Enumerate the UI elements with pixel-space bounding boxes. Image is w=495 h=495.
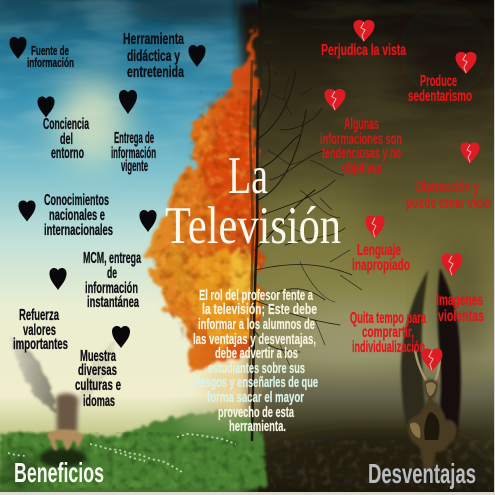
text: Conciencia del entorno: del: [60, 131, 73, 148]
frame line at the right edge: [494, 0, 495, 495]
icon: broken heart 7: [422, 348, 442, 372]
text block: role of the teacher: El rol del profesor fente a: [199, 287, 313, 304]
text: Algunas informaciones son tendenciosas y no objetivas: informaciones son: [320, 131, 402, 148]
text: Refuerza valores importantes: Refuerza: [19, 307, 59, 324]
text: Distracción y puede crear vicio: [406, 179, 491, 212]
icon: heart 7: [49, 268, 67, 290]
illustration: winged angel figure: [10, 337, 115, 450]
frame line at the bottom edge: [0, 492, 495, 495]
text: Herramienta didáctica y entretenida: didáctica y: [127, 48, 180, 65]
text: Quita tempo para comprartir, individualización: [350, 310, 426, 356]
text: Muestra diversas culturas e idomas: [75, 348, 121, 410]
text: Fuente de información: información: [27, 55, 74, 70]
background: bright sky (benefits side): [0, 0, 262, 495]
icon: heart 1: [9, 37, 27, 59]
text block: role of the teacher: riesgos y enseñarles de que: [194, 374, 318, 391]
text: MCM, entrega de información instantánea: información: [85, 280, 138, 297]
benefit texts: [13, 31, 184, 410]
text: Refuerza valores importantes: importantes: [13, 336, 68, 353]
benefit texts: información: [111, 145, 156, 162]
icon: heart 2: [188, 45, 206, 67]
broken red hearts (disadvantages): [324, 20, 480, 372]
text block: role of the teacher: la televisión; Este debe: [202, 301, 317, 318]
text: Refuerza valores importantes: valores: [23, 322, 56, 339]
text block: role of the teacher: informar a los alumnos de: [198, 316, 315, 333]
text: Muestra diversas culturas e idomas: diversas: [78, 362, 117, 379]
illustration: bare branches half of the tree: [252, 60, 362, 440]
text block: role of the teacher: provecho de esta: [218, 404, 294, 421]
text: Produce sedentarismo: Produce: [420, 73, 457, 90]
text: MCM, entrega de información instantánea: de: [107, 265, 117, 282]
text: Algunas informaciones son tendenciosas y no objetivas: [320, 116, 402, 177]
text: Herramienta didáctica y entretenida: entretenida: [127, 64, 184, 81]
background: dark stormy sky (disadvantages side): [236, 0, 495, 495]
icon: broken heart 3: [324, 89, 346, 111]
icon: heart 6: [139, 210, 157, 232]
text: Fuente de información: Fuente de: [31, 43, 69, 58]
icon: broken heart 2: [456, 52, 476, 74]
text: Lenguaje inapropiado: [352, 242, 410, 274]
text: Conocimientos nacionales e internacionales: Conocimientos: [44, 192, 109, 209]
text: Herramienta didáctica y entretenida: Herramienta: [123, 31, 184, 48]
disadvantage texts: [320, 42, 491, 356]
text: Conocimientos nacionales e internacionales: nacionales e: [49, 207, 105, 224]
heading: Beneficios: Beneficios: [14, 457, 104, 488]
icon: heart 5: [18, 200, 36, 222]
text: MCM, entrega de información instantánea: instantánea: [87, 294, 139, 311]
text: Refuerza valores importantes: [13, 307, 68, 353]
text block: role of the teacher: herramienta.: [229, 418, 286, 435]
text: Entrega de información vigente: Entrega de: [114, 130, 154, 147]
text: Quita tempo para comprartir, individualización: individualización: [352, 339, 425, 356]
black hearts (benefits): [9, 37, 206, 348]
text block: role of the teacher: debe advertir a los: [215, 345, 298, 362]
text: Muestra diversas culturas e idomas: Muestra: [80, 348, 116, 365]
illustration: orange autumn half of the tree: [146, 30, 259, 413]
text block: role of the teacher: forma sacar el mayor: [207, 389, 304, 406]
illustration: winged demon figure: [401, 268, 461, 470]
text: Algunas informaciones son tendenciosas y no objetivas: tendenciosas y no: [322, 145, 401, 162]
meadow grass with flowers: [0, 407, 268, 490]
text: Algunas informaciones son tendenciosas y no objetivas: objetivas: [342, 160, 382, 177]
text: Conciencia del entorno: entorno: [51, 145, 84, 162]
title: La Televisión: [165, 147, 341, 255]
icon: heart 4: [119, 90, 137, 114]
text: Entrega de información vigente: vigente: [121, 158, 148, 175]
title: La Televisión: Televisión: [165, 197, 341, 255]
icon: broken heart 1: [354, 20, 374, 42]
text block: role of the teacher: estudiantes sobre sus: [208, 360, 305, 377]
text: MCM, entrega de información instantánea: [83, 250, 141, 311]
text block: role of the teacher: las ventajas y desventajas,: [193, 331, 316, 348]
text: Entrega de información vigente: [111, 130, 156, 175]
icon: heart 3: [37, 96, 55, 118]
text: Quita tempo para comprartir, individualización: comprartir,: [362, 324, 414, 341]
text: Conciencia del entorno: [43, 116, 89, 162]
icon: broken heart 5: [366, 216, 384, 238]
text: Lenguaje inapropiado: Lenguaje: [357, 242, 401, 259]
icon: broken heart 6: [442, 254, 462, 276]
text: Quita tempo para comprartir, individualización: Quita tempo para: [350, 310, 426, 327]
text: Muestra diversas culturas e idomas: culturas e: [75, 377, 121, 394]
text: Perjudica la vista: Perjudica la vista: [321, 42, 406, 59]
text: MCM, entrega de información instantánea: MCM, entrega: [83, 250, 141, 267]
text: Fuente de información: [27, 43, 74, 70]
text: Conciencia del entorno: Conciencia: [43, 116, 89, 133]
title: La Televisión: La: [228, 147, 268, 205]
text block: role of the teacher: [193, 287, 318, 435]
text: Conocimientos nacionales e internacionales: internacionales: [44, 222, 113, 239]
text: Imagenes violentas: [436, 292, 484, 325]
text: Herramienta didáctica y entretenida: [123, 31, 184, 81]
text: Algunas informaciones son tendenciosas y no objetivas: Algunas: [344, 116, 379, 133]
icon: broken heart 4: [460, 142, 480, 164]
text: Lenguaje inapropiado: inapropiado: [352, 257, 410, 274]
icon: heart 8: [112, 326, 130, 348]
text: Conocimientos nacionales e internacionales: [44, 192, 113, 239]
text: Muestra diversas culturas e idomas: idomas: [83, 393, 115, 410]
text: Produce sedentarismo: [408, 73, 472, 105]
